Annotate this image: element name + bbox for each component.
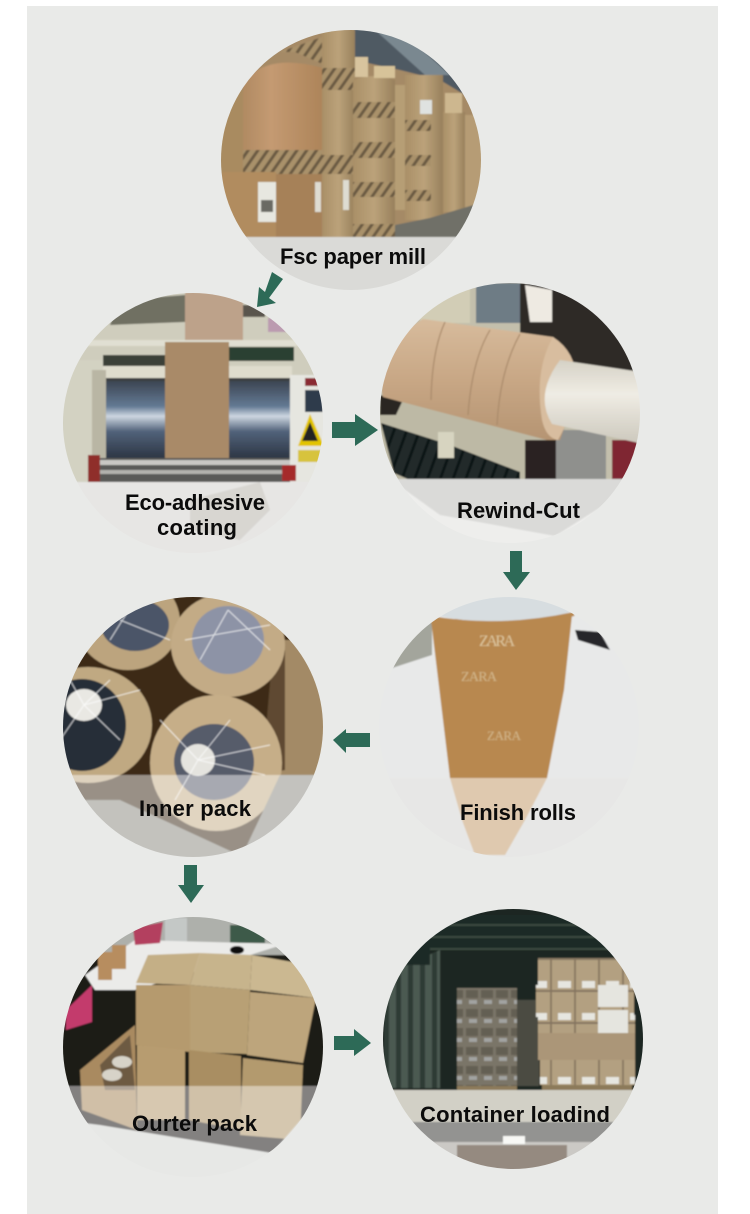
arrow: coating to rewind [332, 414, 378, 446]
photo: coating machine with silver roller [63, 293, 322, 540]
photo: shrink-wrapped rolls in a carton [63, 597, 323, 857]
step 5: Inner pack [63, 597, 323, 857]
photo: kraft roll on white rewinding shaft [380, 283, 640, 536]
caption band [68, 1084, 318, 1177]
photo: pallets inside shipping container [380, 905, 650, 1177]
label [125, 490, 265, 540]
arrow: outer pack to container [334, 1029, 371, 1056]
label: Container loadind [420, 1102, 610, 1127]
step 7: Container loading [380, 905, 650, 1177]
step 3: Rewind-Cut [380, 283, 640, 536]
label: Inner pack [139, 796, 252, 821]
caption band [246, 236, 456, 290]
label: Rewind-Cut [457, 498, 581, 523]
arrow: rewind to finish [503, 551, 530, 590]
photo: stacked kraft paper rolls [215, 25, 490, 297]
caption band [398, 478, 622, 543]
photo: finished printed kraft roll [393, 597, 610, 856]
step 4: Finish rolls [393, 597, 610, 856]
arrow: finish to inner pack [333, 729, 370, 753]
photo: stacked cardboard cartons [63, 917, 323, 1154]
label: Ourter pack [132, 1111, 258, 1136]
caption band [390, 777, 628, 857]
step 6: Ourter pack [63, 917, 323, 1154]
label: Finish rolls [460, 800, 576, 825]
caption band [77, 481, 309, 553]
arrow: inner pack to outer pack [178, 865, 204, 903]
caption band [72, 774, 314, 857]
label: coating [157, 515, 237, 540]
printed brand marks on roll: ZARA [487, 728, 522, 743]
printed brand marks on roll: ZARA [479, 633, 515, 650]
step 2: Eco-adhesive coating [63, 293, 322, 540]
label: Eco-adhesive [125, 490, 265, 515]
printed brand marks on roll [461, 633, 522, 743]
printed brand marks on roll: ZARA [461, 670, 498, 685]
label: Fsc paper mill [280, 244, 426, 269]
caption band [393, 1089, 633, 1169]
step 1: Fsc paper mill [215, 25, 490, 297]
arrow: paper mill to coating [257, 272, 283, 307]
